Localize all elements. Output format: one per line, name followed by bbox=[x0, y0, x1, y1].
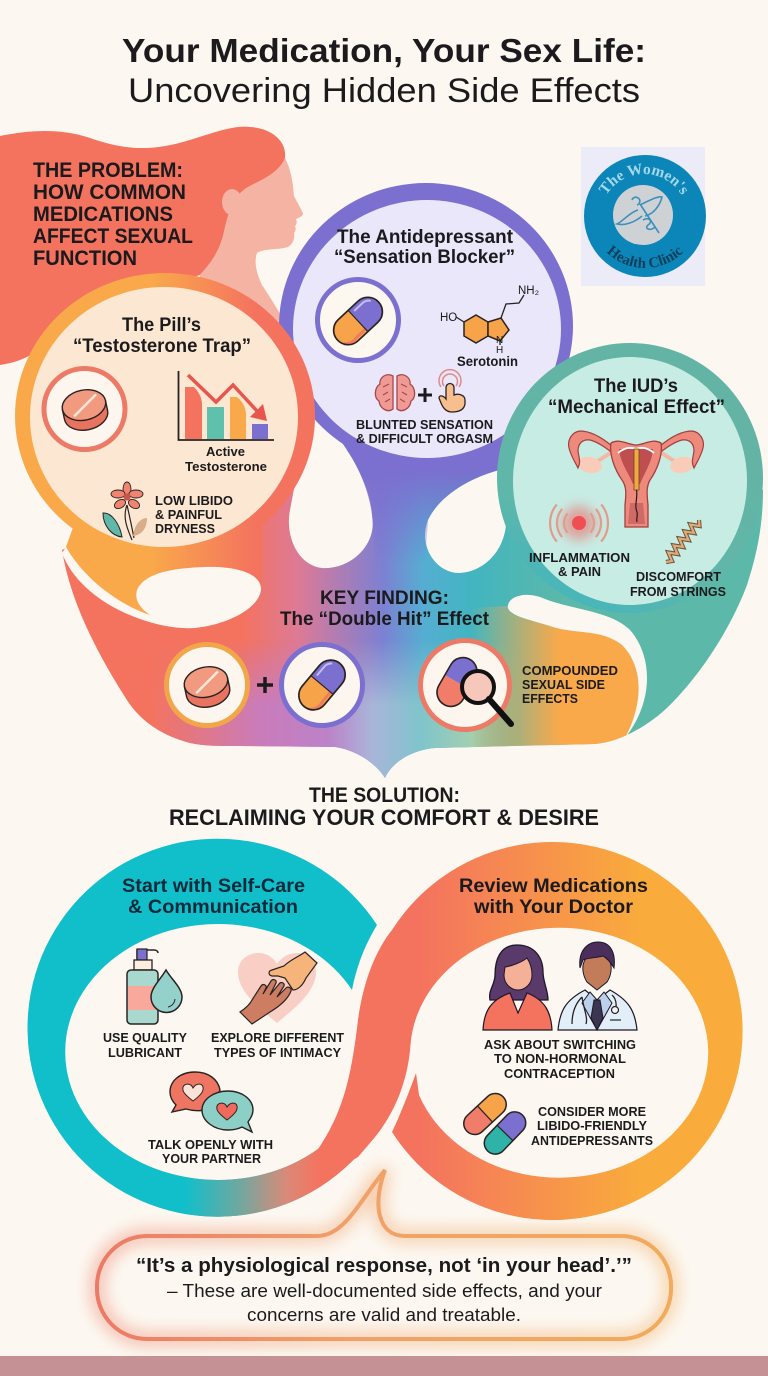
heading: antidepressant bbox=[334, 226, 515, 268]
text: discomfort from strings bbox=[630, 569, 726, 599]
quote text bbox=[136, 1254, 632, 1325]
title: Uncovering Hidden Side Effects bbox=[128, 72, 640, 110]
text: blunted sensation bbox=[356, 417, 493, 446]
text: explore intimacy: TYPES OF INTIMACY bbox=[214, 1045, 341, 1060]
panel: the iud mechanical effect bbox=[497, 343, 763, 613]
icon: touching finger bbox=[439, 370, 465, 412]
icon: inflammation pulse bbox=[550, 504, 608, 542]
text: compounded side effects: COMPOUNDED bbox=[522, 663, 618, 678]
text: non-hormonal contraception bbox=[484, 1037, 636, 1081]
heading: review medications: Review Medications bbox=[459, 875, 648, 897]
text: libido-friendly antidepressants: ANTIDEPRESSANTS bbox=[531, 1133, 653, 1148]
logo: the womens health clinic bbox=[581, 147, 706, 286]
quote text: “It’s a physiological response, not ‘in your head’.’” bbox=[136, 1254, 632, 1277]
plus sign bbox=[418, 388, 432, 402]
text: compounded side effects: SEXUAL SIDE bbox=[522, 677, 605, 692]
text: non-hormonal contraception: TO NON-HORMONAL bbox=[494, 1051, 626, 1066]
text: blunted sensation: & DIFFICULT ORGASM bbox=[356, 431, 493, 446]
heading: review medications bbox=[459, 875, 648, 918]
text: explore intimacy: EXPLORE DIFFERENT bbox=[211, 1030, 344, 1045]
central gradient flow shape bbox=[62, 444, 763, 778]
icon: tablet bbox=[166, 644, 248, 726]
text: low libido: & PAINFUL bbox=[155, 507, 222, 522]
text: use quality lubricant bbox=[103, 1030, 187, 1060]
title bbox=[122, 32, 646, 110]
text: inflammation and pain: & PAIN bbox=[558, 564, 601, 579]
heading: the problem: FUNCTION bbox=[33, 247, 137, 270]
heading: the solution: THE SOLUTION: bbox=[309, 784, 460, 807]
chart: falling active testosterone bbox=[178, 371, 274, 440]
text: libido-friendly antidepressants: CONSIDER MORE bbox=[538, 1104, 646, 1119]
text: inflammation and pain: INFLAMMATION bbox=[529, 550, 630, 565]
text: talk openly: TALK OPENLY WITH bbox=[148, 1137, 273, 1152]
icon: patient and doctor bbox=[483, 942, 637, 1030]
heading: the problem: THE PROBLEM: bbox=[33, 159, 183, 182]
icon: capsule in ring bbox=[318, 280, 398, 360]
title: Your Medication, Your Sex Life: bbox=[122, 32, 646, 69]
heading: key finding: KEY FINDING: bbox=[320, 588, 449, 609]
heading: the problem: MEDICATIONS bbox=[33, 203, 173, 226]
plus sign bbox=[257, 677, 273, 693]
icon: serotonin molecule: N bbox=[496, 335, 503, 346]
icon: alternative capsules bbox=[459, 1089, 530, 1159]
icon: caduceus bbox=[617, 197, 662, 233]
icon: chat bubbles with hearts bbox=[170, 1072, 253, 1132]
heading: the solution bbox=[169, 784, 599, 830]
text: low libido bbox=[155, 493, 233, 536]
heading: self-care: & Communication bbox=[128, 896, 298, 918]
text: blunted sensation: BLUNTED SENSATION bbox=[356, 417, 493, 432]
text: non-hormonal contraception: ASK ABOUT SWITCHING bbox=[484, 1037, 636, 1052]
text: non-hormonal contraception: CONTRACEPTION bbox=[504, 1066, 615, 1081]
text: explore intimacy bbox=[211, 1030, 344, 1060]
icon: lubricant bottle and drop bbox=[127, 949, 182, 1024]
callout: physiological response quote bbox=[97, 1170, 671, 1339]
heading: review medications: with Your Doctor bbox=[473, 896, 633, 918]
heading: antidepressant: The Antidepressant bbox=[337, 226, 513, 248]
text: talk openly bbox=[148, 1137, 273, 1166]
text: inflammation and pain bbox=[529, 550, 630, 579]
text: low libido: LOW LIBIDO bbox=[155, 493, 233, 508]
heading: the problem: HOW COMMON bbox=[33, 181, 186, 204]
icon: capsule bbox=[282, 644, 362, 726]
heading: self-care: Start with Self-Care bbox=[122, 875, 305, 897]
text: compounded side effects: EFFECTS bbox=[522, 691, 578, 706]
text: libido-friendly antidepressants: LIBIDO-FRIENDLY bbox=[537, 1118, 647, 1133]
panel: the pill testosterone trap bbox=[15, 273, 315, 559]
heading: key finding bbox=[280, 588, 490, 630]
heading: antidepressant: “Sensation Blocker” bbox=[334, 246, 515, 268]
illustration: woman silhouette with flowing hair bbox=[0, 127, 303, 365]
text: use quality lubricant: LUBRICANT bbox=[108, 1045, 182, 1060]
heading: the problem: AFFECT SEXUAL bbox=[33, 225, 193, 248]
label: active testosterone bbox=[185, 444, 267, 474]
icon: serotonin molecule: NH₂ bbox=[518, 285, 539, 297]
text: talk openly: YOUR PARTNER bbox=[162, 1151, 262, 1166]
heading: the pill: The Pill’s bbox=[122, 314, 201, 336]
panel: antidepressant sensation blocker bbox=[279, 183, 573, 469]
logo: the womens health clinic: Health Clinic bbox=[606, 244, 683, 268]
heading: the pill: “Testosterone Trap” bbox=[73, 335, 251, 357]
panel: self-care and communication bbox=[28, 839, 377, 1217]
label: active testosterone: Testosterone bbox=[185, 459, 267, 474]
footer bar bbox=[0, 1356, 768, 1376]
text: discomfort from strings: DISCOMFORT bbox=[636, 569, 721, 584]
text: use quality lubricant: USE QUALITY bbox=[103, 1030, 187, 1045]
text: discomfort from strings: FROM STRINGS bbox=[630, 584, 726, 599]
icon: serotonin molecule: H bbox=[496, 345, 503, 356]
icon: heart and hands bbox=[238, 952, 317, 1024]
icon: uterus with iud bbox=[569, 431, 703, 527]
quote text: – These are well-documented side effects, and your bbox=[167, 1281, 602, 1301]
text: compounded side effects bbox=[522, 663, 618, 706]
icon: serotonin molecule: HO bbox=[440, 312, 457, 324]
text: low libido: DRYNESS bbox=[155, 521, 215, 536]
label: serotonin: Serotonin bbox=[457, 353, 518, 369]
heading: the problem bbox=[33, 159, 193, 270]
icon: capsule under magnifier bbox=[420, 640, 511, 730]
text: libido-friendly antidepressants bbox=[531, 1104, 653, 1148]
icon: brain bbox=[375, 375, 415, 411]
heading: the solution: RECLAIMING YOUR COMFORT & DESIRE bbox=[169, 805, 599, 830]
icon: iud strings coil bbox=[666, 520, 700, 562]
heading: key finding: The “Double Hit” Effect bbox=[280, 609, 490, 630]
icon: serotonin molecule bbox=[440, 285, 539, 356]
panel: review medications with doctor bbox=[318, 842, 743, 1220]
label: active testosterone: Active bbox=[206, 444, 245, 459]
quote text: concerns are valid and treatable. bbox=[247, 1305, 521, 1325]
heading: the pill bbox=[73, 314, 251, 357]
icon: flower bbox=[103, 482, 147, 540]
icon: tablet in ring bbox=[44, 368, 125, 450]
heading: the iud bbox=[548, 375, 725, 418]
heading: the iud: The IUD’s bbox=[594, 375, 678, 397]
heading: self-care bbox=[122, 875, 305, 918]
logo: the womens health clinic: The Women's bbox=[598, 163, 687, 194]
heading: the iud: “Mechanical Effect” bbox=[548, 396, 725, 418]
panel: key finding double hit bbox=[166, 588, 618, 730]
